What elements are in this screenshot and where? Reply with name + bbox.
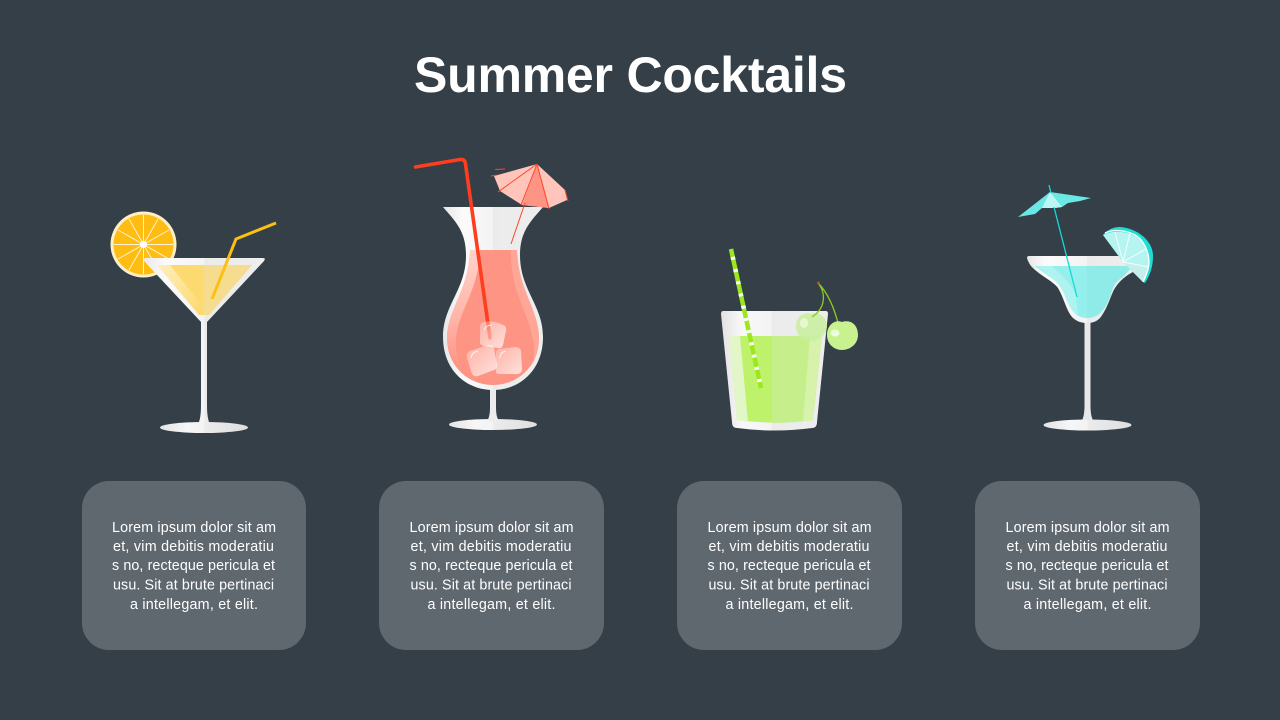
card 3 text: [708, 520, 872, 613]
tumbler glass: [721, 311, 828, 430]
card 1 text: s no, recteque pericula et: [112, 558, 275, 574]
glass foot: [449, 419, 537, 430]
card 2 text: et, vim debitis moderatiu: [410, 539, 572, 555]
title: Summer Cocktails: [414, 47, 847, 103]
card 1 text: a intellegam, et elit.: [130, 597, 258, 613]
cherry stems: [812, 283, 839, 327]
ice cubes: [467, 321, 522, 376]
blue liquid: [1035, 266, 1133, 318]
striped straw: [731, 249, 761, 388]
cocktail 4: blue margarita: [1018, 185, 1153, 430]
liquid highlight left: [447, 250, 480, 369]
red straw: [416, 159, 490, 338]
green liquid: [729, 336, 822, 422]
panel: card 2: [379, 481, 604, 650]
liquid highlight right: [511, 250, 539, 366]
panel: card 4: [975, 481, 1200, 650]
card 1 text: et, vim debitis moderatiu: [113, 539, 274, 555]
card 2 text: Lorem ipsum dolor sit am: [410, 520, 574, 536]
martini glass: [144, 258, 265, 424]
cocktail 2: pink hurricane: [416, 159, 568, 430]
card 4 text: et, vim debitis moderatiu: [1006, 539, 1168, 555]
card 3 text: a intellegam, et elit.: [726, 597, 854, 613]
margarita stem: [1082, 320, 1093, 420]
panel: card 3: [677, 481, 902, 650]
blue cocktail umbrella: [1018, 185, 1091, 297]
icon: orange slice: [110, 212, 176, 278]
card 4 text: [1006, 520, 1170, 613]
liquid highlight: [729, 336, 748, 422]
panel: card 1: [82, 481, 306, 650]
cocktail 1: yellow martini: [110, 212, 276, 433]
pink cocktail umbrella: [491, 164, 568, 244]
cocktail 3: green tumbler: [721, 249, 858, 430]
pink liquid: [447, 250, 539, 385]
card 4 text: s no, recteque pericula et: [1006, 558, 1169, 574]
card 3 text: s no, recteque pericula et: [708, 558, 871, 574]
hurricane glass: [443, 207, 543, 390]
card 2 text: a intellegam, et elit.: [428, 597, 556, 613]
card 4 text: a intellegam, et elit.: [1024, 597, 1152, 613]
card 1 text: usu. Sit at brute pertinaci: [113, 578, 274, 594]
card 3 text: et, vim debitis moderatiu: [708, 539, 870, 555]
card 3 text: Lorem ipsum dolor sit am: [708, 520, 872, 536]
card 2 text: [410, 520, 574, 613]
yellow liquid: [157, 265, 252, 315]
margarita glass: [1027, 256, 1135, 323]
glass foot: [160, 422, 248, 433]
card 1 text: Lorem ipsum dolor sit am: [112, 520, 276, 536]
hurricane glass stem: [487, 388, 499, 421]
lime wedge: [1103, 227, 1153, 283]
front cherry: [827, 321, 858, 350]
glass foot: [1044, 420, 1132, 430]
yellow straw: [212, 223, 276, 299]
card 3 text: usu. Sit at brute pertinaci: [708, 578, 870, 594]
card 2 text: usu. Sit at brute pertinaci: [410, 578, 572, 594]
card 4 text: usu. Sit at brute pertinaci: [1006, 578, 1168, 594]
card 1 text: [112, 520, 276, 613]
card 4 text: Lorem ipsum dolor sit am: [1006, 520, 1170, 536]
back cherry: [796, 313, 827, 341]
card 2 text: s no, recteque pericula et: [410, 558, 573, 574]
